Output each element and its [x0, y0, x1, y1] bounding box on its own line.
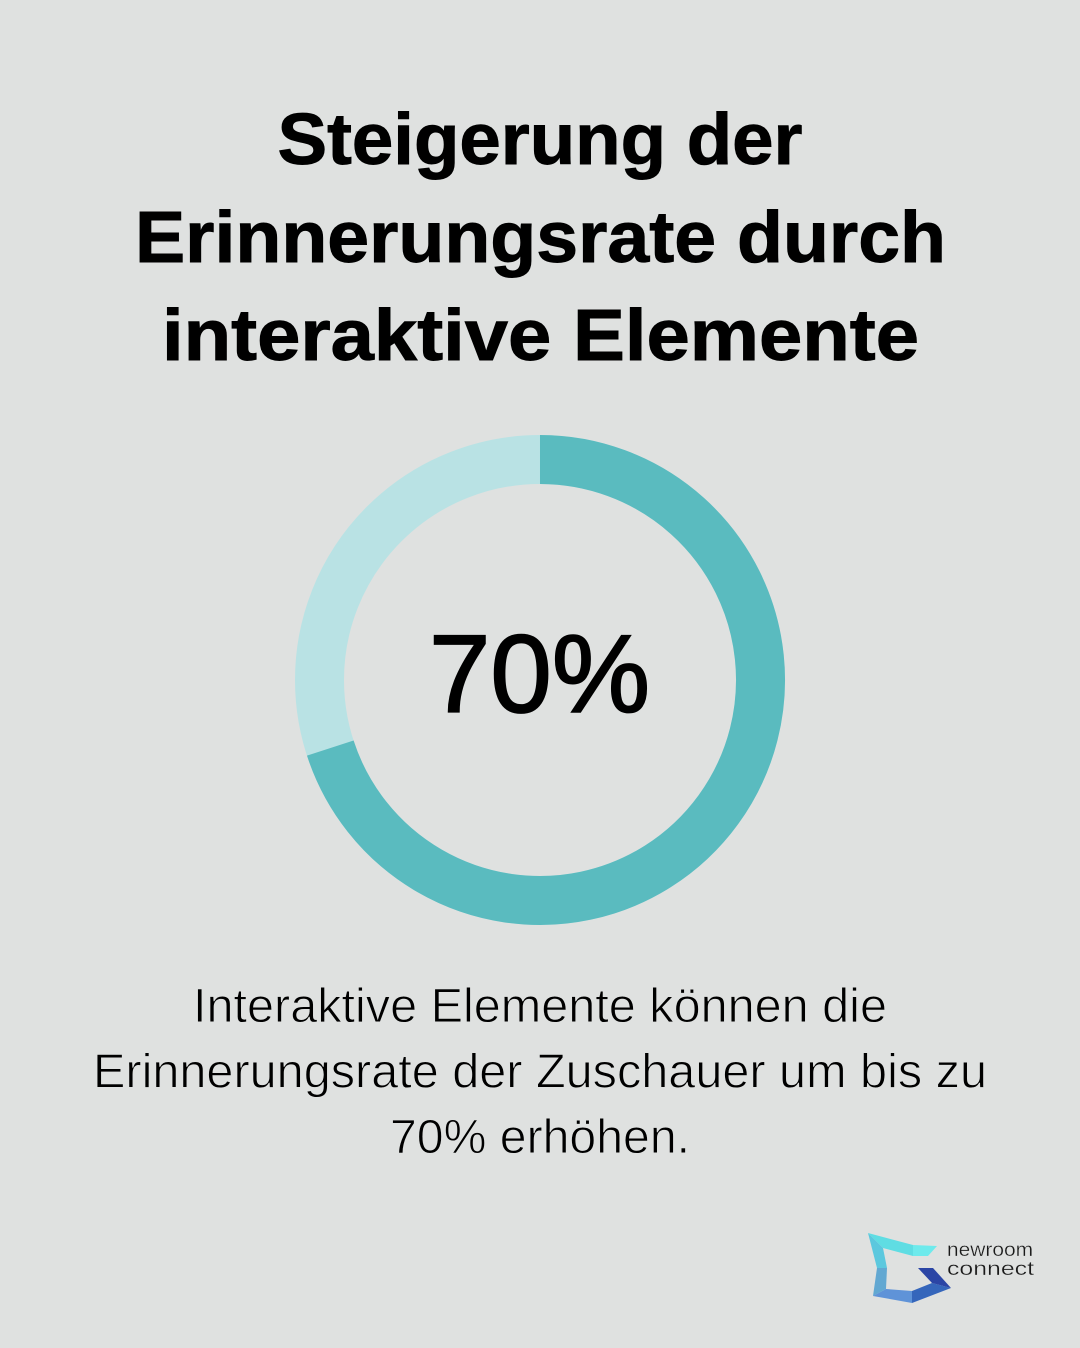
donut value: 70% [429, 613, 650, 736]
title: interaktive Elemente [162, 296, 919, 376]
logo: newroom connect [868, 1233, 1035, 1303]
title: Steigerung der [278, 100, 802, 180]
description text [93, 980, 987, 1164]
description text: Erinnerungsrate der Zuschauer um bis zu [93, 1046, 987, 1098]
title [135, 100, 946, 376]
description text: Interaktive Elemente können die [193, 980, 887, 1033]
title: Erinnerungsrate durch [135, 198, 946, 278]
logo wordmark: newroom [947, 1240, 1033, 1261]
description text: 70% erhöhen. [390, 1111, 690, 1164]
icon: logo mark [868, 1233, 951, 1303]
logo wordmark: connect [947, 1259, 1035, 1280]
donut chart: 70% [320, 460, 761, 900]
logo wordmark [947, 1240, 1035, 1280]
